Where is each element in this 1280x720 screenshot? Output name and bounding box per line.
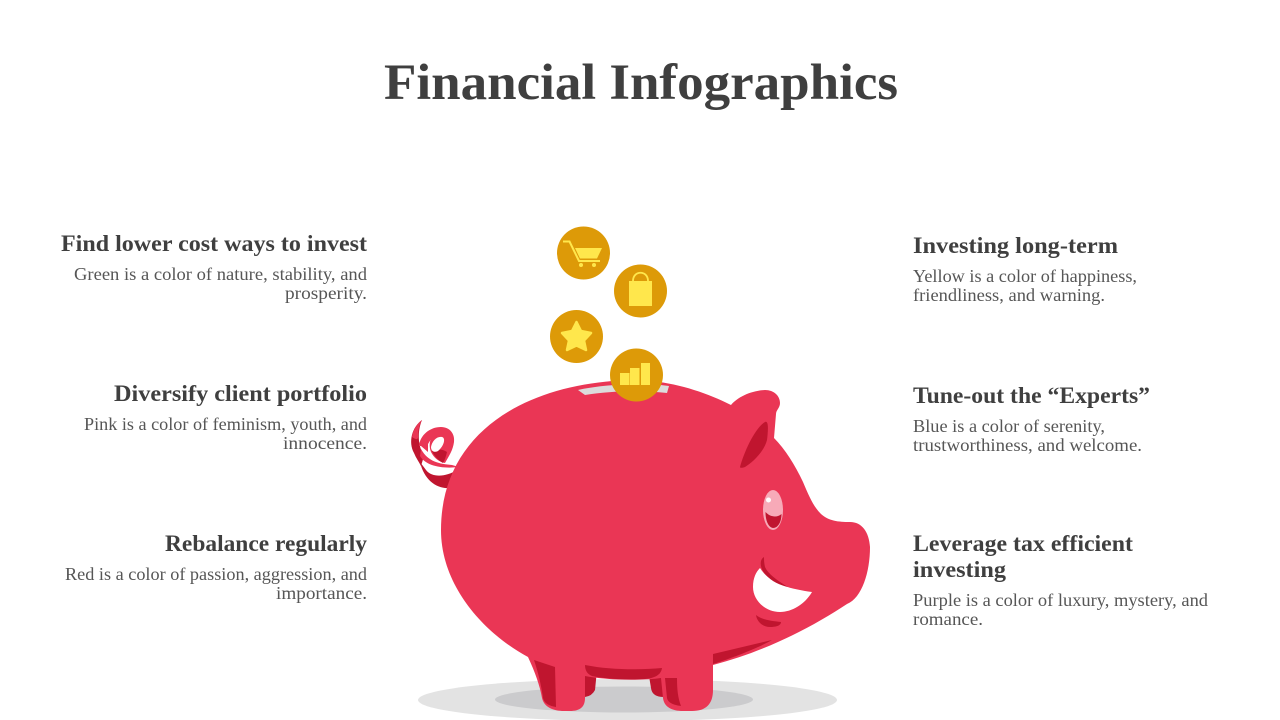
panel: find lower cost ways to invest: Green is a color of nature, stability, and xyxy=(74,264,367,284)
icon: cart coin xyxy=(557,226,610,280)
panel: rebalance regularly xyxy=(65,531,367,603)
panel: investing long-term: Investing long-term xyxy=(913,233,1118,258)
panel: rebalance regularly: Red is a color of passion, aggression, and xyxy=(65,564,367,584)
panel: find lower cost ways to invest xyxy=(61,231,367,303)
leg and belly shading xyxy=(534,640,772,707)
title: Financial Infographics xyxy=(384,55,898,111)
panel: investing long-term xyxy=(913,233,1137,305)
panel: diversify client portfolio: innocence. xyxy=(283,433,367,453)
pig tail xyxy=(411,420,459,488)
panel: rebalance regularly: Rebalance regularly xyxy=(165,531,367,556)
panel: leverage tax efficient investing: Purple is a color of luxury, mystery, and xyxy=(913,590,1208,610)
pig eye xyxy=(763,490,783,530)
panel: tune-out the experts: trustworthiness, and welcome. xyxy=(913,435,1142,455)
coin slot xyxy=(578,384,669,395)
icon: bar chart coin xyxy=(610,348,663,402)
panel: diversify client portfolio: Pink is a color of feminism, youth, and xyxy=(84,414,367,434)
panel: find lower cost ways to invest: prosperity. xyxy=(285,283,367,303)
panel: tune-out the experts: Blue is a color of serenity, xyxy=(913,416,1105,436)
panel: leverage tax efficient investing: Leverage tax efficient xyxy=(913,531,1133,556)
panel: diversify client portfolio xyxy=(84,381,367,453)
panel: leverage tax efficient investing xyxy=(913,531,1208,629)
pig body xyxy=(441,380,870,711)
icon: star coin xyxy=(550,310,603,363)
panel: leverage tax efficient investing: romance. xyxy=(913,609,983,629)
panel: tune-out the experts xyxy=(913,383,1150,455)
pig mouth xyxy=(753,557,812,627)
panel: diversify client portfolio: Diversify client portfolio xyxy=(114,381,367,406)
pig ear xyxy=(740,422,768,468)
icon: shopping bag coin xyxy=(614,264,667,318)
piggy bank xyxy=(411,380,870,711)
ground shadow xyxy=(418,679,837,720)
far legs xyxy=(585,670,664,697)
panel: leverage tax efficient investing: investing xyxy=(913,557,1007,582)
panel: tune-out the experts: Tune-out the “Experts” xyxy=(913,383,1150,408)
panel: rebalance regularly: importance. xyxy=(276,583,367,603)
panel: investing long-term: Yellow is a color of happiness, xyxy=(913,266,1137,286)
panel: find lower cost ways to invest: Find lower cost ways to invest xyxy=(61,231,367,256)
panel: investing long-term: friendliness, and warning. xyxy=(913,285,1105,305)
